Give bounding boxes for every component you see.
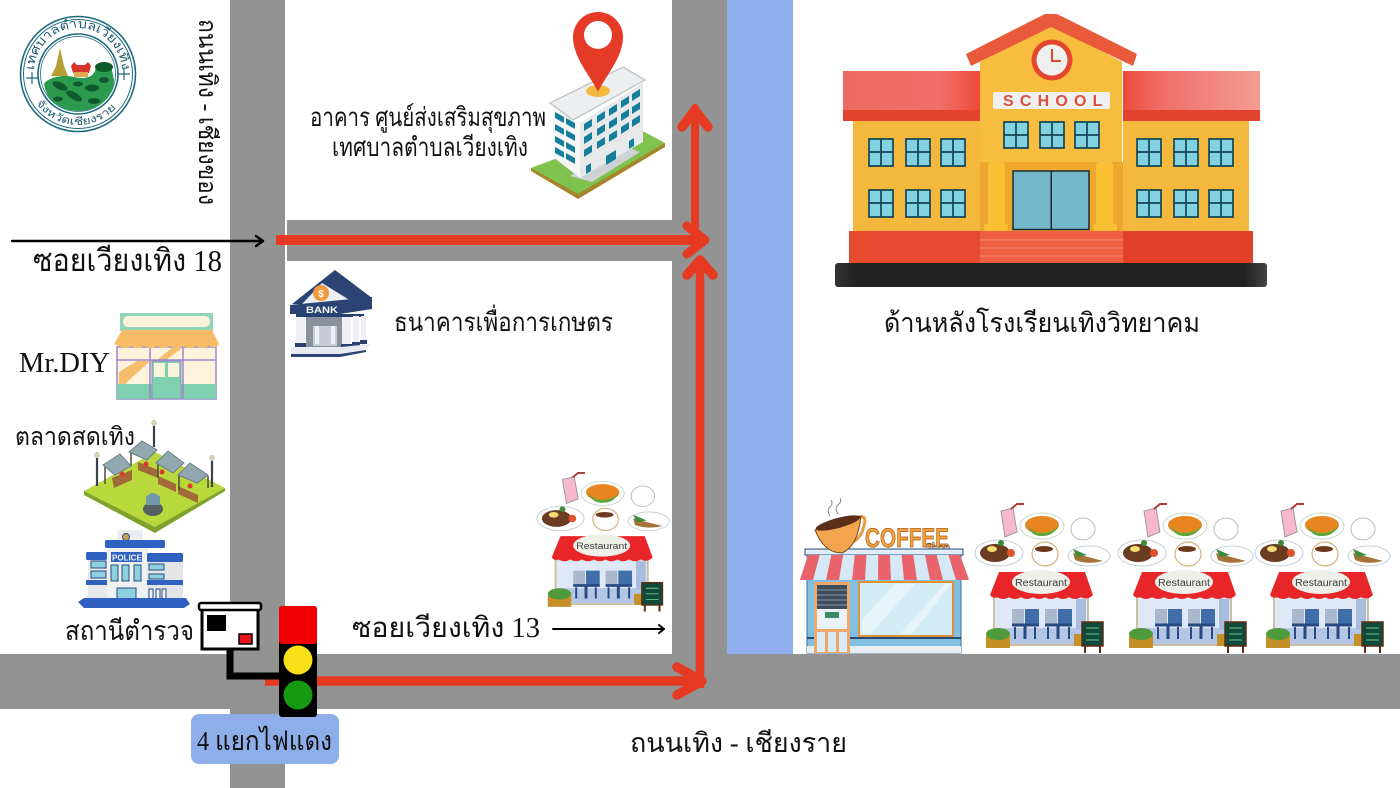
icon: bank: $ [318, 289, 324, 300]
school roofs [843, 71, 1260, 121]
icon: restaurant beside soi 13 [537, 473, 669, 612]
label: health promotion building [310, 103, 546, 162]
coffee door [814, 582, 850, 653]
coffee cup [814, 498, 865, 553]
label: Mr.DIY: Mr.DIY [19, 348, 110, 379]
label: Thoeng fresh market: ตลาดสดเทิง [15, 424, 135, 451]
icon: restaurant 1: Restaurant [1015, 578, 1067, 589]
coffee window [859, 582, 953, 636]
icon: fresh market [84, 420, 225, 533]
icon: restaurant 2: Restaurant [1158, 578, 1210, 589]
icon: restaurant 2 [1118, 504, 1253, 653]
school door [1013, 171, 1089, 230]
label: soi 13: ซอยเวียงเทิง 13 [352, 612, 540, 644]
school base walls and steps [849, 231, 1253, 264]
school plinth [835, 263, 1267, 287]
icon: restaurant 3: Restaurant [1295, 578, 1347, 589]
route: upper red arrow [682, 108, 708, 235]
route: soi 18 red arrow [276, 226, 705, 254]
river [727, 0, 793, 654]
label: Thoeng - Chiang Rai road: ถนนเทิง - เชียงราย [630, 728, 847, 758]
icon: police station [78, 530, 190, 608]
label: soi 18: ซอยเวียงเทิง 18 [33, 243, 222, 278]
label box: 4-way traffic light junction [191, 714, 339, 764]
icon: bank [290, 270, 372, 357]
arrow: black arrow to soi 18 [12, 236, 263, 246]
icon: municipality logo: เทศบาลตำบลเวียงเทิง [27, 19, 130, 69]
label: bank: ธนาคารเพื่อการเกษตร [394, 304, 613, 337]
coffee awning [800, 555, 969, 580]
label: health promotion building: อาคาร ศูนย์ส่งเสริมสุขภาพ [310, 103, 546, 133]
icon: traffic light [279, 606, 317, 717]
icon: coffee shop: COFFEE [865, 523, 949, 553]
label: Thoeng - Chiang Khong road: ถนนเทิง - เชียงของ [193, 19, 221, 205]
icon: traffic camera [199, 603, 282, 676]
icon: restaurant 1 [975, 504, 1110, 653]
label: police station: สถานีตำรวจ [65, 616, 194, 646]
icon: restaurant beside soi 13: Restaurant [576, 541, 628, 552]
icon: coffee shop [800, 498, 969, 653]
school sign: SCHOOL [1003, 93, 1109, 110]
arrow: black arrow to soi 13 [553, 625, 664, 633]
route: bottom red arrow [265, 667, 702, 695]
icon: municipality logo [20, 16, 136, 132]
school gable [966, 14, 1137, 66]
icon: municipality logo: จังหวัดเชียงราย [38, 100, 116, 125]
icon: bank: BANK [306, 305, 339, 315]
school windows [869, 122, 1233, 217]
icon: police station: POLICE [112, 554, 142, 562]
icon: coffee shop: Shop [925, 541, 950, 556]
icon: health promotion building with pin [531, 12, 665, 199]
school columns [984, 162, 1117, 231]
label: health promotion building: เทศบาลตำบลเวียงเทิง [332, 133, 528, 162]
icon: restaurant 3 [1255, 504, 1390, 653]
icon: Mr.DIY store [114, 313, 219, 399]
school walls [853, 24, 1249, 232]
label box: 4-way traffic light junction: 4 แยกไฟแดง [197, 726, 332, 756]
route: lower red arrow [687, 260, 713, 688]
school clock [1032, 40, 1072, 80]
icon: school [835, 14, 1267, 287]
label: behind Thoeng Wittayakhom school: ด้านหลังโรงเรียนเทิงวิทยาคม [884, 308, 1200, 338]
